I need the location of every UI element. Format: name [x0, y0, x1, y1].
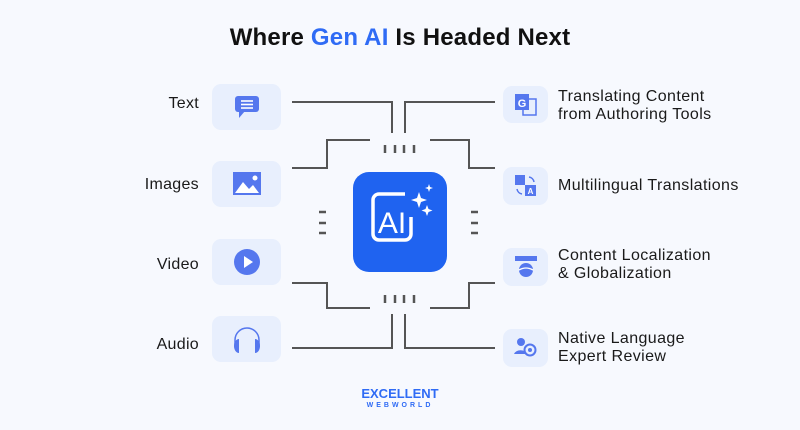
title: Where Gen AI Is Headed Next [230, 24, 570, 51]
right label: Translating Content: from Authoring Tools [558, 106, 712, 123]
icon: headphones [212, 316, 281, 362]
left label: Images: Images [145, 176, 199, 193]
left label: Video: Video [157, 256, 199, 273]
icon: image [212, 161, 281, 207]
right label: Multilingual Translations: Multilingual Translations [558, 177, 739, 194]
right label: Native Language Expert Review: Native Language [558, 330, 685, 347]
AI chip icon: AI [378, 207, 406, 240]
right label: Content Localization: & Globalization [558, 265, 672, 282]
right label: Native Language Expert Review: Expert Review [558, 348, 666, 365]
logo: WEBWORLD [367, 402, 433, 409]
icon: translate G [503, 86, 548, 123]
icon: chat [212, 84, 281, 130]
right label: Translating Content [558, 88, 712, 123]
logo [361, 386, 439, 409]
icon: translate G: G [517, 98, 526, 110]
right label: Translating Content: Translating Content [558, 88, 705, 105]
icon: expert review [503, 329, 548, 367]
right label: Native Language Expert Review [558, 330, 685, 365]
logo: EXCELLENT [361, 386, 439, 401]
icon: multilingual [503, 167, 548, 205]
left label: Audio: Audio [157, 336, 199, 353]
icon: localization [503, 248, 548, 286]
right label: Content Localization: Content Localization [558, 247, 711, 264]
icon: play [212, 239, 281, 285]
left label: Text: Text [168, 95, 199, 112]
icon: multilingual: A [527, 187, 533, 196]
right label: Content Localization [558, 247, 711, 282]
AI chip icon [353, 172, 447, 272]
